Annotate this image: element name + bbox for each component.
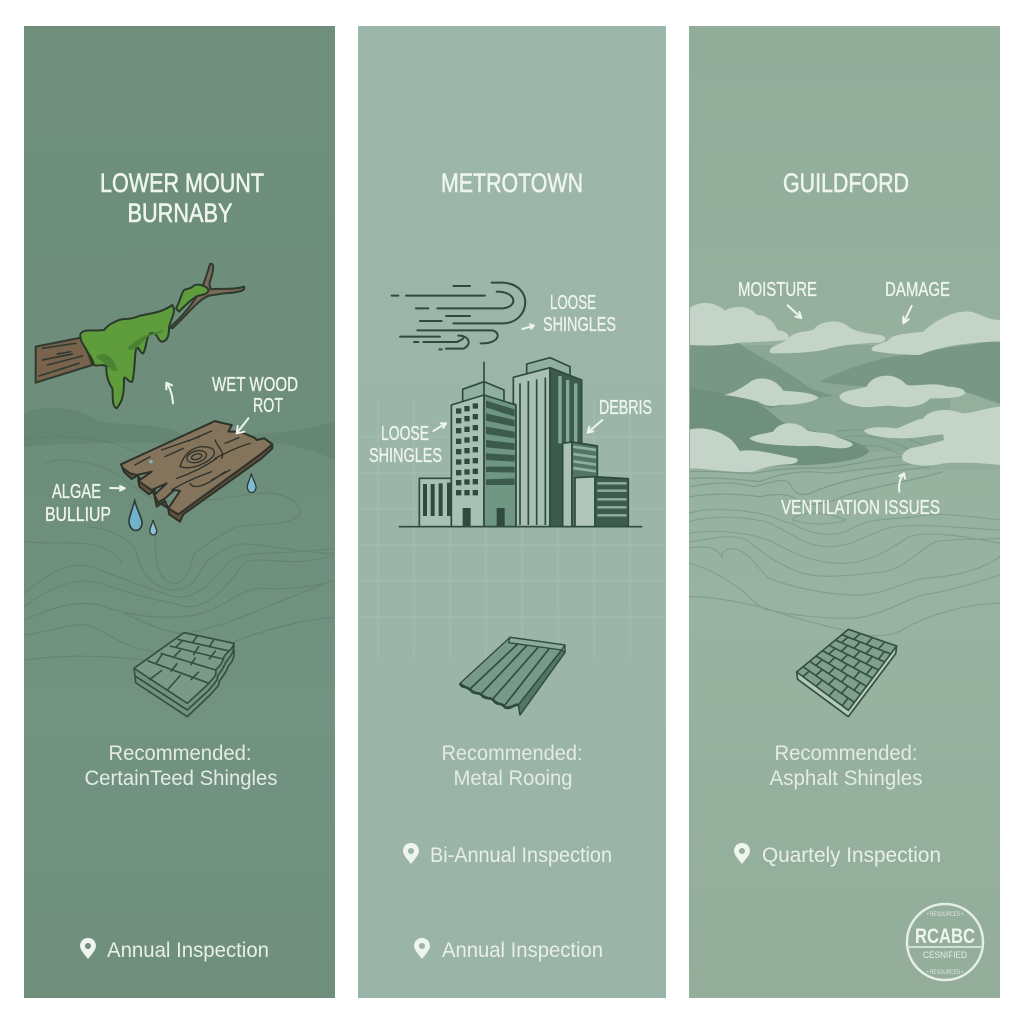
recommendation	[442, 742, 582, 790]
title: LOWER MOUNT	[100, 168, 264, 198]
icon: metal roofing	[460, 637, 565, 715]
panel: Lower Mount Burnaby	[24, 26, 335, 998]
label: damage: DAMAGE	[885, 279, 950, 301]
label: loose shingles top: SHINGLES	[543, 314, 616, 336]
icon: shingles	[134, 633, 234, 717]
label: wet wood rot: WET WOOD	[212, 374, 298, 396]
illustration: wooden planks	[121, 421, 272, 522]
illustration: wind and city buildings	[392, 283, 642, 527]
inspection: annual: Annual Inspection	[107, 939, 269, 962]
inspection: annual: Annual Inspection	[442, 939, 603, 962]
inspection: quarterly: Quartely Inspection	[762, 844, 941, 867]
hills	[690, 340, 1000, 470]
title: METROTOWN	[441, 168, 583, 198]
recommendation	[770, 742, 922, 790]
badge: RCABC certified	[907, 904, 983, 980]
lower contour lines	[689, 509, 1000, 636]
illustration: valley with clouds and contours	[690, 303, 1000, 504]
title: BURNABY	[128, 198, 232, 228]
label: loose shingles top: LOOSE	[550, 292, 596, 314]
label: algae buildup	[45, 481, 111, 526]
arrow	[788, 305, 801, 318]
arrow	[899, 473, 905, 492]
buildings	[399, 358, 642, 527]
arrow	[166, 383, 173, 403]
title: GUILDFORD	[783, 168, 909, 198]
label: wet wood rot	[212, 374, 298, 417]
recommendation: Asphalt Shingles	[770, 767, 922, 790]
label: loose shingles left: LOOSE	[381, 423, 429, 445]
label: ventilation issues: VENTILATION ISSUES	[781, 497, 940, 519]
arrow	[522, 324, 534, 329]
panel: Guildford	[689, 26, 1000, 998]
branch	[36, 264, 244, 383]
arrow	[237, 418, 248, 433]
label: algae buildup: ALGAE	[52, 481, 101, 503]
moss	[80, 285, 208, 408]
recommendation: Recommended:	[108, 742, 252, 765]
recommendation: Metal Rooing	[454, 767, 572, 790]
recommendation: Recommended:	[442, 742, 582, 765]
illustration: mossy branch and rotting plank	[36, 264, 256, 535]
water drops	[129, 473, 256, 535]
recommendation	[84, 742, 278, 790]
badge: RCABC certified: CESNIFIED	[923, 950, 967, 960]
panel: Metrotown	[358, 26, 666, 998]
clouds	[690, 303, 1000, 472]
label: loose shingles left: SHINGLES	[369, 445, 442, 467]
inspection: bi-annual: Bi-Annual Inspection	[430, 844, 612, 867]
arrow	[110, 486, 125, 491]
arrow	[588, 420, 602, 433]
label: debris: DEBRIS	[599, 397, 652, 419]
icon: wind	[392, 283, 525, 349]
recommendation: Recommended:	[774, 742, 918, 765]
arrow	[433, 423, 446, 431]
badge: RCABC certified: • RESOURCES •	[927, 912, 963, 918]
label: wet wood rot: ROT	[253, 395, 283, 417]
label: moisture: MOISTURE	[738, 279, 817, 301]
label: loose shingles top	[543, 292, 616, 336]
icon: shingles	[797, 629, 897, 717]
recommendation: CertainTeed Shingles	[84, 767, 278, 790]
contour lines	[690, 430, 943, 504]
title	[100, 168, 264, 228]
label: algae buildup: BULLIUP	[45, 504, 111, 526]
badge: RCABC certified: • RESOURCES •	[927, 970, 963, 976]
arrow	[903, 306, 912, 323]
badge: RCABC certified: RCABC	[915, 925, 975, 948]
label: loose shingles left	[369, 423, 442, 467]
